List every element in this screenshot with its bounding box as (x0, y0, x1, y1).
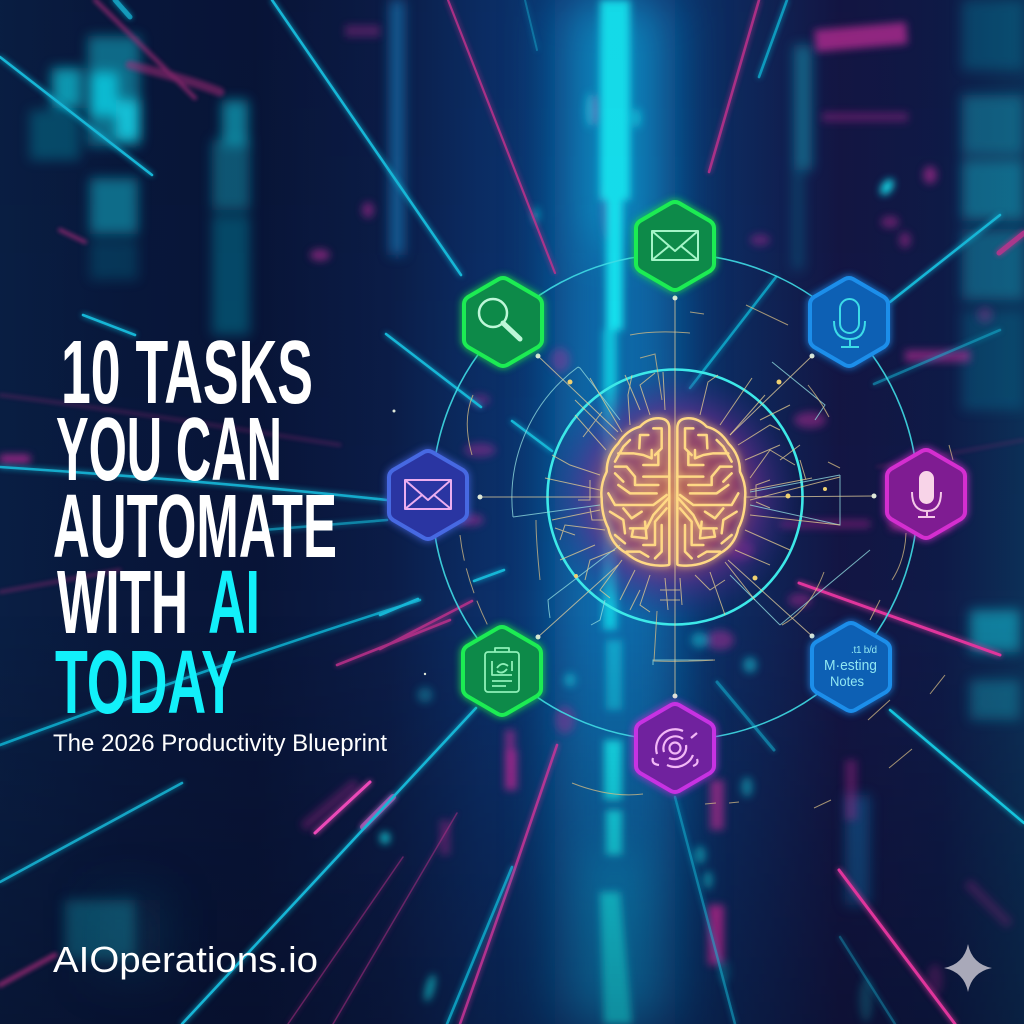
icon: envelope (405, 480, 451, 509)
icon: envelope (652, 231, 698, 260)
hexagon: focus target (636, 704, 714, 792)
hexagon: voice (blue) (810, 278, 888, 366)
hexagon: meeting notes (812, 623, 890, 711)
hexagon: voice (purple) (887, 450, 965, 538)
icon: clipboard (485, 648, 519, 692)
title: TODAY (55, 633, 237, 733)
inner ring (548, 370, 802, 624)
title (53, 323, 337, 733)
title: 10 TASKS (61, 323, 313, 423)
connector lines with end nodes (392, 296, 876, 698)
circuit arcs and brackets (512, 362, 870, 665)
icon: microphone (912, 471, 941, 517)
right hemisphere (677, 418, 745, 566)
outer ring (432, 254, 918, 740)
central radial glow (544, 367, 800, 623)
ring system (432, 254, 953, 808)
radial circuit traces around the brain (545, 372, 840, 615)
icon: sparkle watermark (944, 944, 992, 992)
left hemisphere (601, 418, 669, 566)
central brain icon (601, 418, 745, 566)
title: YOU CAN (56, 400, 282, 500)
gold arcs (460, 305, 953, 808)
hexagon: email (top) (636, 202, 714, 290)
label: meeting notes: M·esting (824, 657, 877, 674)
title: AUTOMATE (53, 477, 337, 577)
label: meeting notes: .t1 b/d (851, 645, 877, 656)
hexagon: email (left) (389, 451, 467, 539)
icon: magnifier (479, 299, 520, 339)
icon: microphone (834, 299, 865, 347)
title: WITH (57, 553, 188, 653)
brand footer: AIOperations.io (53, 939, 318, 980)
title: AI (208, 553, 260, 653)
hexagon: search (464, 278, 542, 366)
label: meeting notes (824, 645, 877, 689)
label: meeting notes: Notes (830, 673, 864, 689)
subtitle: The 2026 Productivity Blueprint (53, 730, 387, 757)
icon: concentric target (653, 729, 698, 767)
hexagon: tasks (463, 627, 541, 715)
